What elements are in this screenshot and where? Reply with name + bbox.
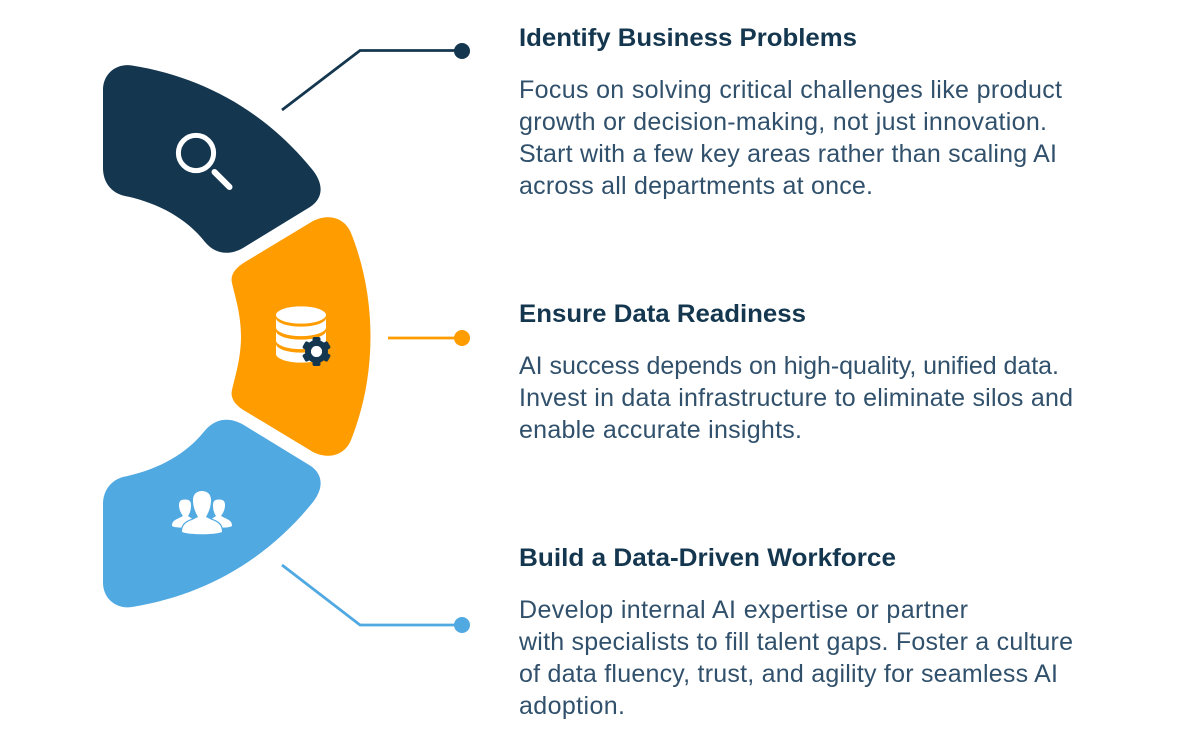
body text: across all departments at once.: [519, 172, 873, 200]
connector: orange: [388, 330, 470, 346]
heading: Identify Business Problems: [519, 24, 857, 52]
body text: [519, 352, 1073, 444]
body text: with specialists to fill talent gaps. Foster a culture: [518, 628, 1073, 656]
body text: Focus on solving critical challenges like product: [519, 76, 1062, 104]
connector: light blue: [282, 565, 470, 633]
body text: [519, 76, 1062, 200]
body text: adoption.: [519, 692, 625, 720]
body text: enable accurate insights.: [519, 416, 802, 444]
text block: identify business problems: [519, 24, 1062, 200]
text block: ensure data readiness: [519, 300, 1073, 444]
body text: [518, 596, 1073, 720]
body text: of data fluency, trust, and agility for seamless AI: [519, 660, 1058, 688]
connector: dark blue: [282, 43, 470, 110]
body text: Develop internal AI expertise or partner: [519, 596, 968, 624]
icon: database with gear: [276, 306, 331, 366]
heading: Ensure Data Readiness: [519, 300, 806, 328]
heading: Build a Data-Driven Workforce: [519, 544, 896, 572]
body text: Start with a few key areas rather than scaling AI: [519, 140, 1057, 168]
segment: build a data-driven workforce: [103, 420, 321, 607]
segment: ensure data readiness: [232, 217, 370, 456]
icon: group of people: [172, 491, 232, 534]
text block: build a data-driven workforce: [518, 544, 1073, 720]
segment: identify business problems: [103, 65, 321, 253]
body text: AI success depends on high-quality, unified data.: [519, 352, 1059, 380]
body text: Invest in data infrastructure to eliminate silos and: [519, 384, 1073, 412]
body text: growth or decision-making, not just innovation.: [519, 108, 1047, 136]
icon: magnifying glass: [178, 135, 230, 187]
